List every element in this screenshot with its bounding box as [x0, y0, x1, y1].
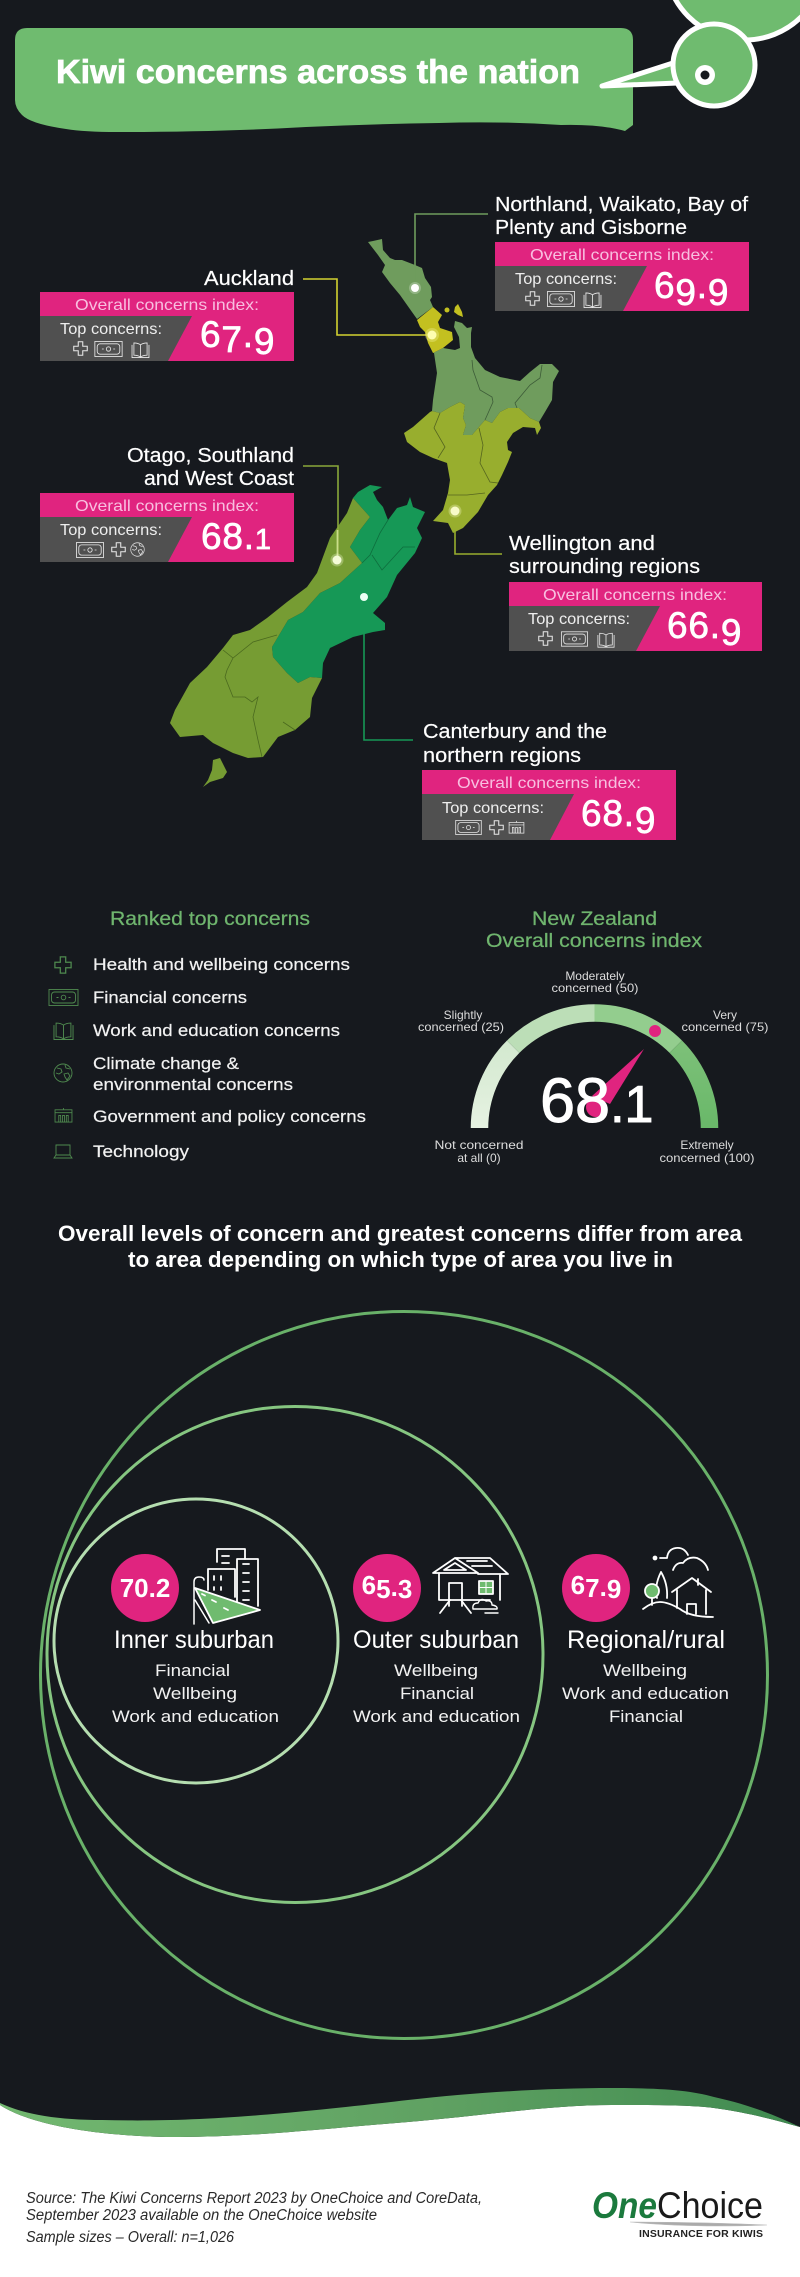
callout: Auckland: Top concerns:	[60, 321, 162, 338]
area concerns list: Financial	[609, 1707, 683, 1726]
leader line: Otago	[303, 466, 344, 566]
heading: Overall concerns index	[486, 930, 702, 952]
heading	[486, 908, 702, 952]
title banner	[15, 28, 633, 132]
concern icons	[539, 632, 614, 647]
callout: Northland, Waikato, Bay of Plenty and Gisborne: Overall concerns index:	[530, 247, 714, 264]
concern icons	[76, 543, 144, 557]
region name: Northland, Waikato, Bay of	[495, 194, 748, 216]
area concerns list	[353, 1661, 520, 1726]
index badge: 5	[376, 1574, 391, 1604]
map of New Zealand	[170, 239, 559, 787]
heading: area types: to area depending on which type of area you live in	[128, 1247, 673, 1272]
index value: 6	[654, 265, 675, 306]
region name: Wellington and	[509, 533, 655, 555]
index badge: .	[391, 1572, 398, 1602]
kiwi mascot	[602, 0, 800, 106]
index box	[422, 770, 676, 840]
gauge scale labels: Extremely	[680, 1138, 734, 1152]
index box	[40, 493, 294, 562]
index box	[495, 242, 749, 311]
gauge scale labels	[418, 969, 768, 1165]
item: health: Health and wellbeing concerns	[93, 956, 350, 974]
index value: 68.1	[201, 516, 272, 557]
region: Wellington and surrounding regions	[404, 402, 541, 533]
region name	[495, 194, 748, 239]
index badge	[111, 1554, 179, 1622]
region name: northern regions	[423, 745, 581, 767]
gauge needle	[586, 1049, 644, 1117]
area concerns list: Work and education	[562, 1684, 729, 1703]
nested circles diagram	[40, 1312, 768, 2038]
source note	[26, 2190, 482, 2246]
footer wave	[0, 2088, 800, 2277]
area concerns list: Wellbeing	[603, 1661, 687, 1680]
item: financial: Financial concerns	[93, 989, 247, 1007]
region name: surrounding regions	[509, 556, 700, 578]
gauge scale labels: concerned (50)	[552, 981, 638, 995]
source note: Sample sizes – Overall: n=1,026	[26, 2229, 234, 2246]
index badge: 6	[362, 1570, 376, 1600]
area concerns list: Work and education	[353, 1707, 520, 1726]
index box	[40, 292, 294, 361]
callout: Wellington and surrounding regions	[509, 533, 762, 653]
gauge scale labels: Not concerned	[434, 1138, 524, 1152]
area title: Regional/rural	[567, 1626, 725, 1654]
index value: 9	[254, 321, 275, 362]
callout: Canterbury and the northern regions	[422, 721, 676, 841]
index value: 9	[635, 800, 656, 841]
gauge scale labels: concerned (100)	[660, 1151, 754, 1165]
panel: New Zealand overall concerns index gauge	[418, 908, 768, 1165]
index value: 7	[221, 319, 243, 360]
region: Northland, Waikato, Bay of Plenty and Gisborne	[368, 239, 559, 435]
icon: city buildings and road	[194, 1549, 260, 1624]
region name	[423, 721, 607, 767]
item: government: Government and policy concerns	[93, 1108, 366, 1126]
area concerns list: Work and education	[112, 1707, 279, 1726]
index value: 9	[721, 612, 742, 653]
callout: Wellington and surrounding regions: Top concerns:	[528, 611, 630, 628]
index value: 6	[200, 314, 221, 355]
OneChoice logo: Choice	[657, 2185, 763, 2226]
area concerns list: Financial	[400, 1684, 474, 1703]
leader line: Auckland	[303, 279, 439, 342]
gauge scale labels: Very	[713, 1008, 737, 1022]
index badge: 9	[607, 1574, 621, 1604]
gauge arc	[480, 1013, 710, 1128]
area concerns list: Wellbeing	[153, 1684, 237, 1703]
OneChoice logo	[592, 2185, 767, 2240]
leader line: Northland	[409, 214, 488, 294]
callout: Wellington and surrounding regions: Overall concerns index:	[543, 587, 727, 604]
source note: September 2023 available on the OneChoice website	[26, 2207, 377, 2224]
index badge: 6	[571, 1570, 585, 1600]
heading: area types	[58, 1221, 742, 1272]
region name: Otago, Southland	[127, 445, 294, 467]
item: work and education: Work and education concerns	[93, 1022, 340, 1040]
region name: and West Coast	[144, 468, 294, 490]
item: climate: Climate change &	[93, 1055, 239, 1073]
index box	[509, 582, 762, 651]
region name: Auckland	[204, 268, 294, 290]
callout: Otago, Southland and West Coast	[40, 445, 294, 562]
item: climate	[54, 1055, 293, 1094]
OneChoice logo: One	[592, 2185, 657, 2226]
concern icons	[526, 292, 601, 308]
item: financial	[49, 989, 247, 1007]
column: regional/rural	[562, 1548, 729, 1726]
region name: Canterbury and the	[423, 721, 607, 743]
area concerns list	[112, 1661, 279, 1726]
region: Canterbury and the northern regions	[272, 485, 425, 683]
heading: area types: Overall levels of concern and greatest concerns differ from area	[58, 1221, 742, 1246]
callout: Northland, Waikato, Bay of Plenty and Gisborne: Top concerns:	[515, 271, 617, 288]
gauge value: 68.1	[540, 1066, 653, 1136]
area concerns list: Financial	[155, 1661, 230, 1680]
region: Otago, Southland and West Coast	[170, 498, 370, 787]
item: technology	[54, 1143, 190, 1161]
gauge scale labels: Slightly	[444, 1008, 482, 1022]
source note: Source: The Kiwi Concerns Report 2023 by OneChoice and CoreData,	[26, 2190, 482, 2207]
index badge: 70.2	[120, 1573, 170, 1603]
gauge marker	[649, 1025, 661, 1037]
index badge	[353, 1554, 421, 1622]
region name	[127, 445, 294, 490]
index value: .	[697, 265, 708, 306]
concern icons	[74, 341, 149, 358]
index badge: .	[600, 1572, 607, 1602]
index badge	[562, 1554, 630, 1622]
heading: New Zealand	[532, 908, 657, 930]
column: inner suburban	[111, 1549, 279, 1726]
index badge: 7	[585, 1573, 600, 1603]
callout: Canterbury and the northern regions: Overall concerns index:	[457, 775, 641, 792]
icon: rural house and trees	[643, 1548, 713, 1617]
gauge scale labels: concerned (75)	[682, 1020, 768, 1034]
heading: Ranked top concerns	[110, 908, 310, 930]
concern icons	[456, 820, 524, 835]
icon: suburban house	[433, 1558, 508, 1613]
panel: ranked top concerns	[49, 908, 366, 1161]
callout: Auckland	[40, 268, 294, 362]
gauge scale labels: at all (0)	[457, 1151, 501, 1165]
gauge scale labels: Moderately	[565, 969, 625, 983]
callout: Canterbury and the northern regions: Top concerns:	[442, 800, 544, 817]
area concerns list	[562, 1661, 729, 1726]
column: outer suburban	[353, 1554, 520, 1726]
callout: Otago, Southland and West Coast: Overall concerns index:	[75, 498, 259, 515]
index value: 9	[675, 272, 697, 313]
callout: Auckland: Overall concerns index:	[75, 297, 259, 314]
callout: Otago, Southland and West Coast: Top concerns:	[60, 522, 162, 539]
area concerns list: Wellbeing	[394, 1661, 478, 1680]
item: technology: Technology	[93, 1143, 190, 1161]
region name: Plenty and Gisborne	[495, 217, 687, 239]
index value: 68.	[581, 793, 635, 834]
region: Auckland	[417, 304, 463, 353]
gauge scale labels: concerned (25)	[418, 1020, 504, 1034]
leader line: Wellington	[448, 504, 502, 554]
leader line: Canterbury	[360, 593, 413, 740]
region name	[509, 533, 700, 578]
area title: Inner suburban	[114, 1626, 274, 1654]
area title: Outer suburban	[353, 1626, 519, 1654]
title text: Kiwi concerns across the nation	[56, 53, 580, 90]
index badge: 3	[398, 1574, 412, 1604]
index value: .	[243, 314, 254, 355]
OneChoice logo: INSURANCE FOR KIWIS	[639, 2228, 763, 2240]
index value: 9	[708, 272, 729, 313]
callout: Northland, Waikato, Bay of Plenty and Gisborne	[495, 194, 749, 313]
index value: 66.	[667, 605, 721, 646]
item: climate: environmental concerns	[93, 1076, 293, 1094]
